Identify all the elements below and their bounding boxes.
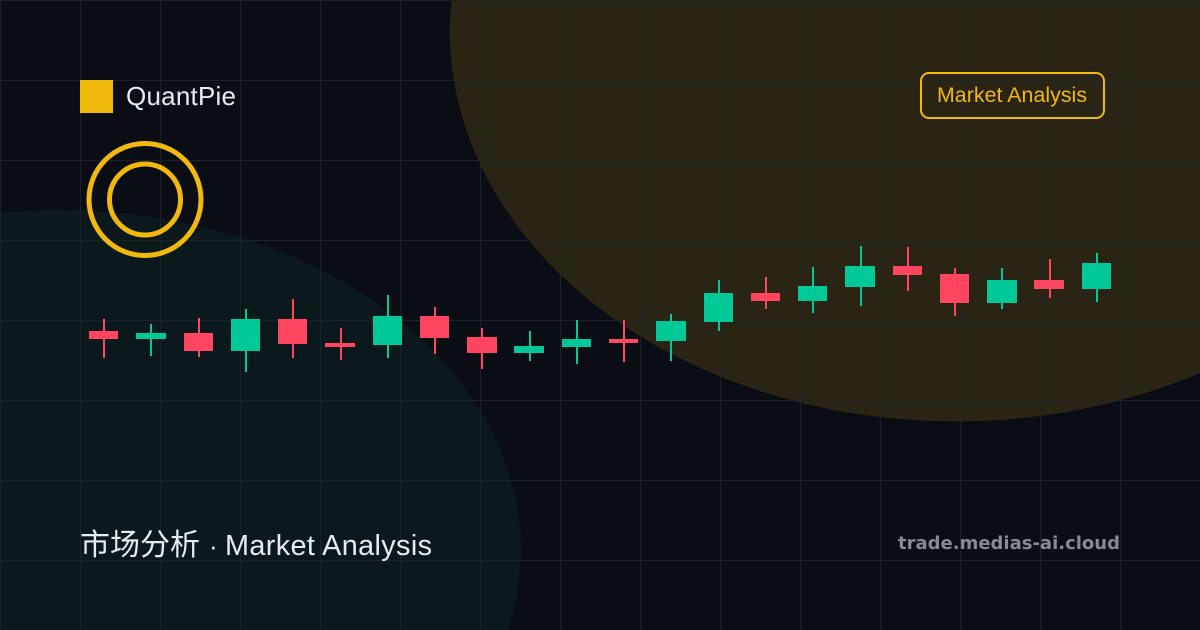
footer title: Market Analysis [225,530,432,562]
brand name: QuantPie [126,81,236,111]
logo square [80,80,113,113]
candlestick chart [89,246,1111,372]
background blob: teal [0,210,521,630]
badge: market analysis: Market Analysis [937,83,1087,107]
badge: market analysis [921,73,1104,118]
icon: concentric rings [89,144,201,256]
background blob: yellow [450,0,1200,421]
footer title: 市场分析 [80,529,200,562]
footer url: trade.medias-ai.cloud [898,533,1120,554]
footer title: · [209,531,218,561]
